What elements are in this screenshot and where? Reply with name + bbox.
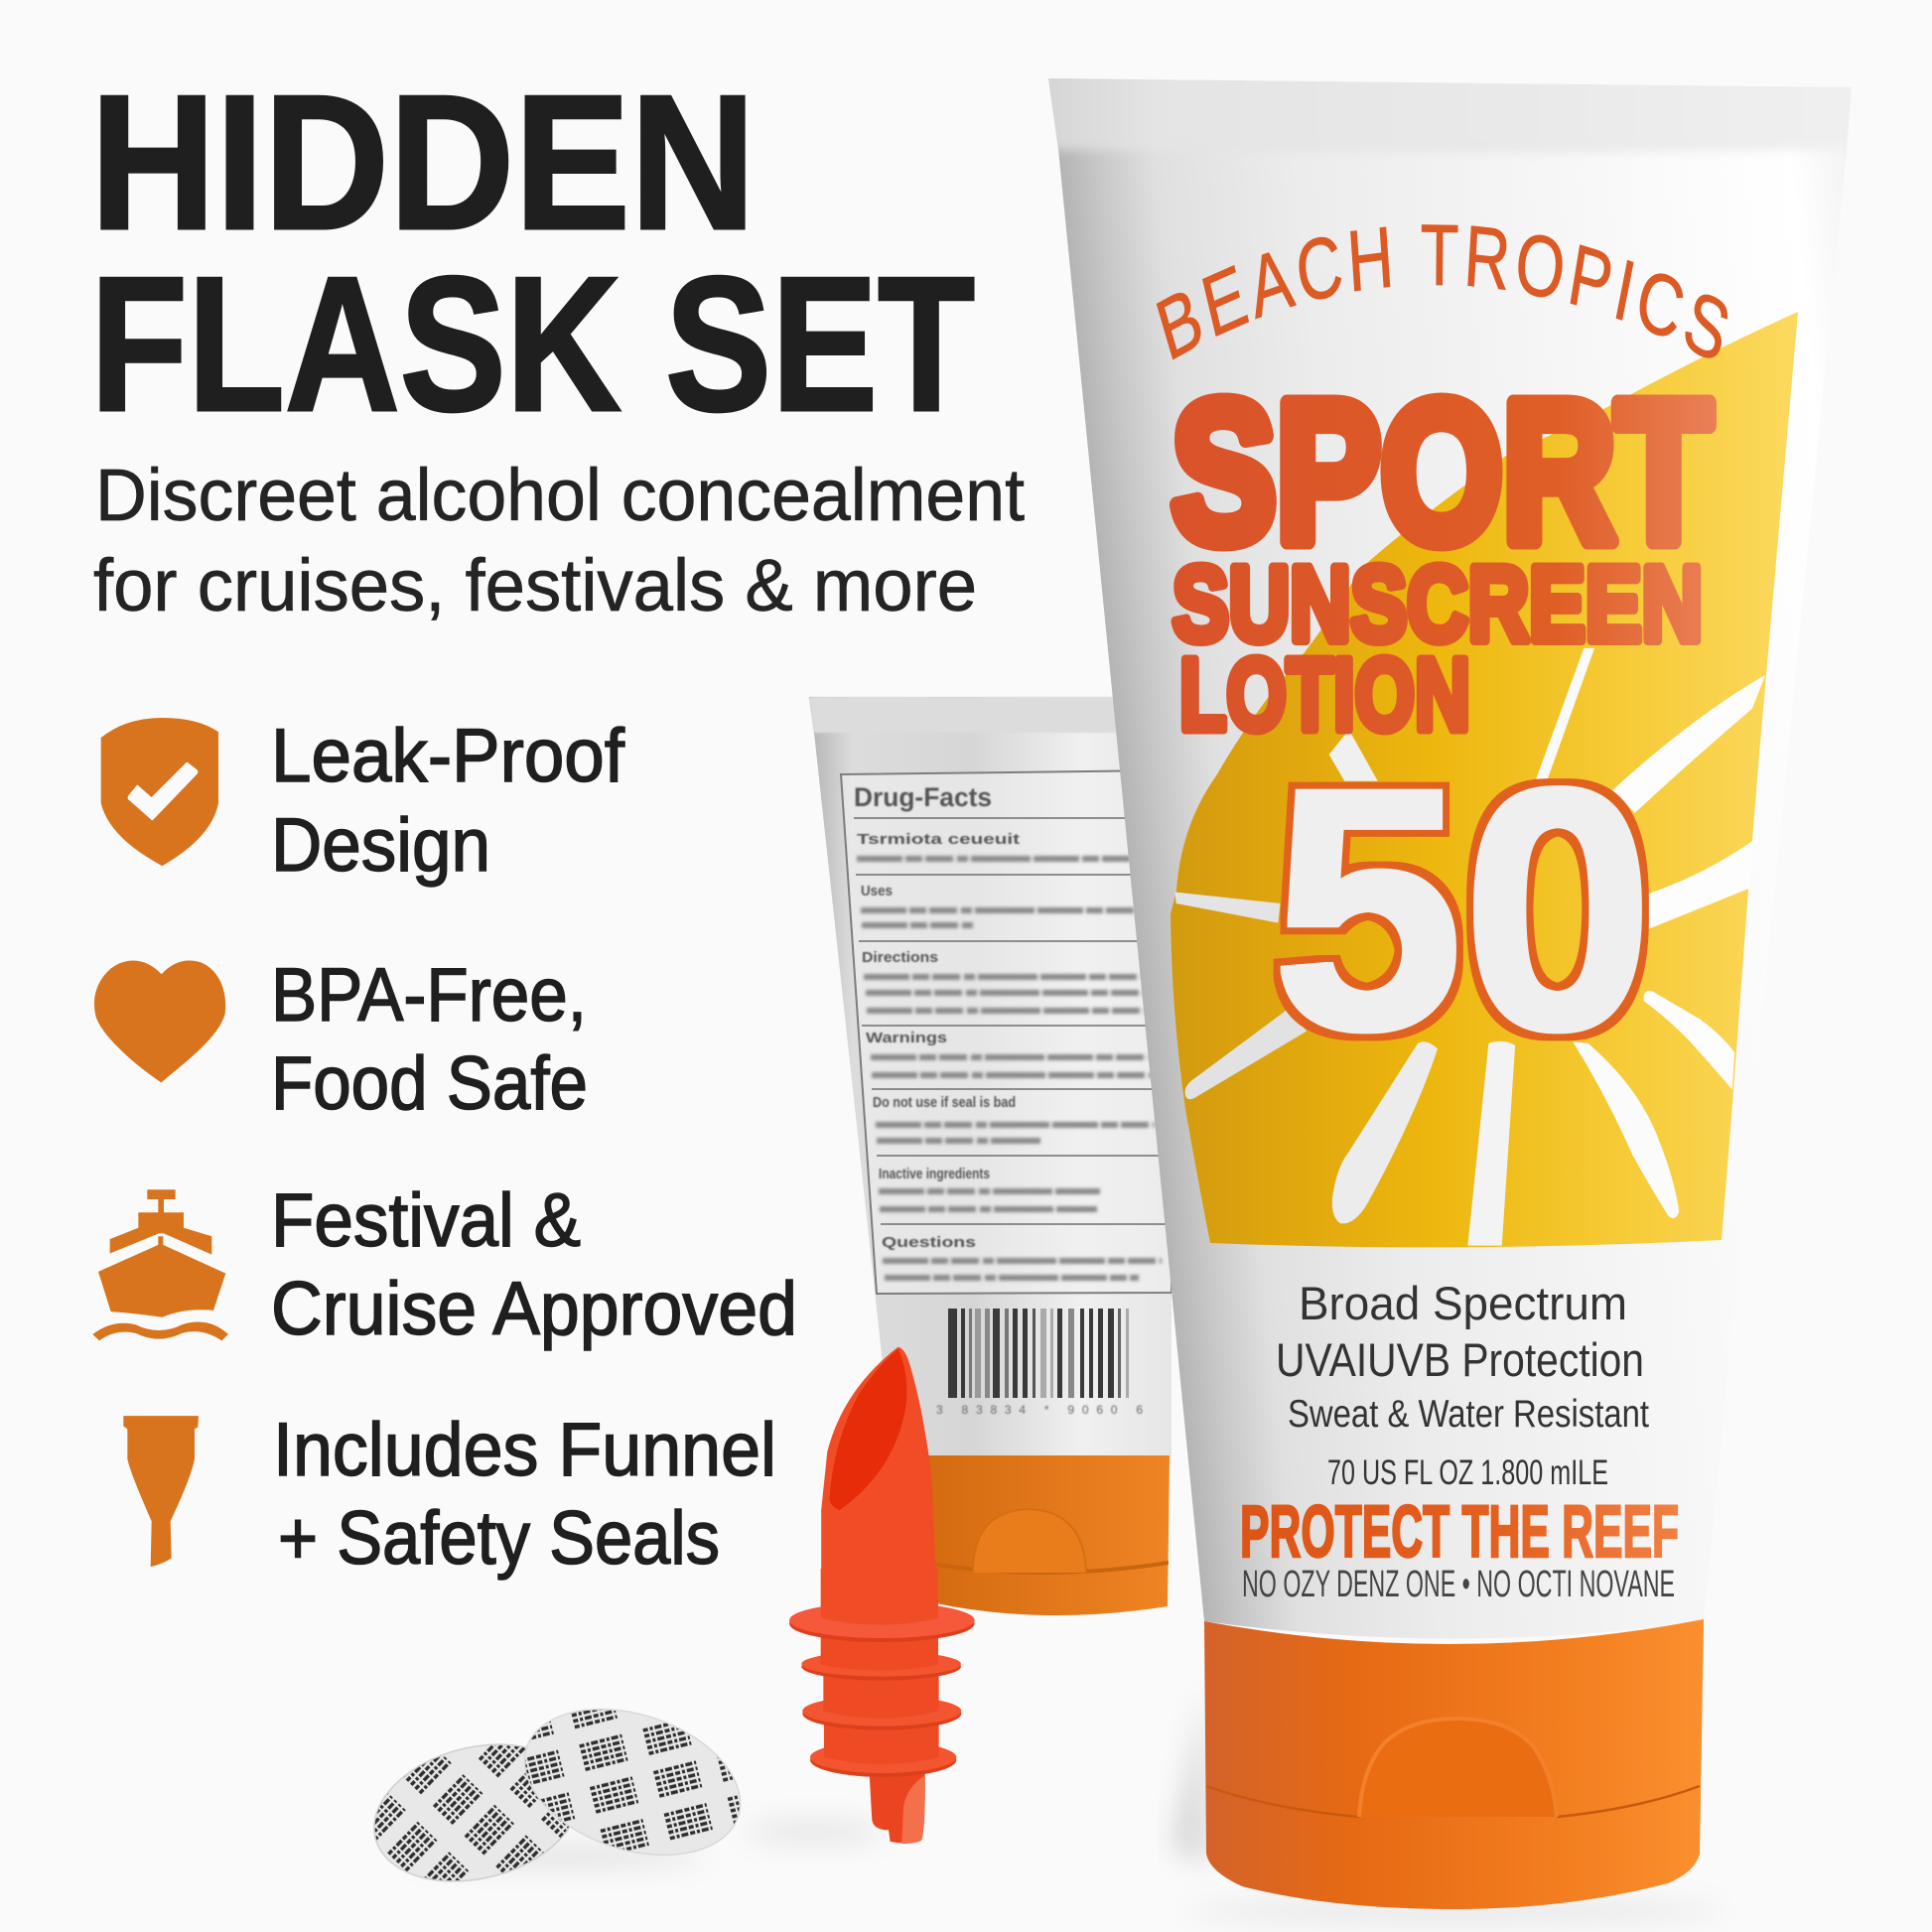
sun graphic [1171, 312, 1798, 1247]
icon: funnel [123, 1416, 199, 1567]
subtitle: for cruises, festivals & more [93, 544, 977, 626]
pourer shadow [745, 1823, 884, 1841]
text: festival and cruise approved: Festival & [271, 1178, 581, 1263]
brand: beach tropics: BEACH TROPICS [1156, 224, 1727, 359]
title [90, 55, 975, 451]
subtitle: Discreet alcohol concealment [95, 454, 1025, 536]
main tube [1048, 78, 1852, 1909]
cap side shadow [1172, 1688, 1207, 1866]
title: FLASK SET [90, 236, 975, 451]
feature: festival and cruise [92, 1178, 797, 1351]
drug facts panel [841, 770, 1172, 1294]
back tube cap [918, 1455, 1170, 1615]
protection claims: UVAIUVB Protection [1276, 1333, 1644, 1386]
text: festival and cruise approved [271, 1178, 797, 1351]
barcode digits: 3 83834 * 9060 6 [936, 1403, 1143, 1417]
heading: drug facts: Drug-Facts [854, 782, 992, 812]
section headings: Inactive ingredients [879, 1166, 990, 1182]
text: includes funnel and safety seals: + Safety Seals [278, 1496, 720, 1581]
ingredient note: NO OZY DENZ ONE • NO OCTI NOVANE [1242, 1564, 1675, 1605]
back tube crimp [809, 697, 1172, 733]
icon: heart [94, 961, 225, 1082]
section headings: Questions [882, 1234, 976, 1251]
section headings: Warnings [866, 1030, 947, 1046]
tube cap [1204, 1619, 1704, 1909]
section headings [857, 831, 1020, 1251]
protection claims: Broad Spectrum [1299, 1277, 1627, 1329]
seals shadow [407, 1849, 705, 1864]
seal: left [359, 1725, 594, 1901]
text: leak-proof design: Leak-Proof [271, 714, 625, 798]
icon: cruise ship [92, 1189, 228, 1340]
spout upper body [821, 1347, 937, 1609]
spout lower rings [789, 1569, 975, 1844]
main tube shadow [1186, 1902, 1723, 1920]
text: bpa-free food safe [271, 953, 588, 1126]
back tube body [809, 697, 1172, 1464]
barcode [948, 1309, 1129, 1398]
text: bpa-free food safe: BPA-Free, [271, 953, 587, 1037]
safety seals [359, 1684, 759, 1901]
feature: funnel and seals [123, 1408, 776, 1581]
seal: right [505, 1684, 759, 1880]
yellow sun panel [1171, 312, 1798, 1247]
product title: SPORT [1172, 359, 1712, 584]
product title: SUNSCREEN [1173, 544, 1703, 663]
text: includes funnel and safety seals: Includes Funnel [273, 1408, 776, 1492]
text: festival and cruise approved: Cruise Approved [271, 1267, 797, 1351]
product title [1172, 359, 1712, 752]
cap hinge notch [1359, 1719, 1557, 1817]
feature: bpa-free [94, 953, 588, 1126]
tube body [1048, 78, 1852, 1638]
protection claims: 70 US FL OZ 1.800 mILE [1327, 1453, 1608, 1492]
subtitle [93, 454, 1025, 626]
tube crimp [1048, 78, 1829, 153]
section headings: Directions [862, 949, 938, 966]
sun rays [1174, 648, 1765, 1246]
text: bpa-free food safe: Food Safe [271, 1041, 588, 1126]
title: HIDDEN [90, 55, 756, 269]
feature: leak-proof [101, 714, 625, 888]
text: leak-proof design [271, 714, 625, 888]
section headings: Uses [861, 883, 893, 899]
section headings: Tsrmiota ceueuit [857, 831, 1020, 848]
icon: shield with check [101, 718, 218, 866]
protection claims [1276, 1277, 1649, 1492]
protection claims: Sweat & Water Resistant [1288, 1393, 1649, 1436]
spf 50: 50 [1273, 719, 1653, 1101]
text: leak-proof design: Design [271, 803, 490, 888]
product title: LOTION [1179, 637, 1470, 752]
pour spout funnel [789, 1347, 975, 1844]
back tube [809, 697, 1172, 1615]
section headings: Do not use if seal is bad [873, 1094, 1016, 1111]
text: includes funnel and safety seals [273, 1408, 776, 1581]
